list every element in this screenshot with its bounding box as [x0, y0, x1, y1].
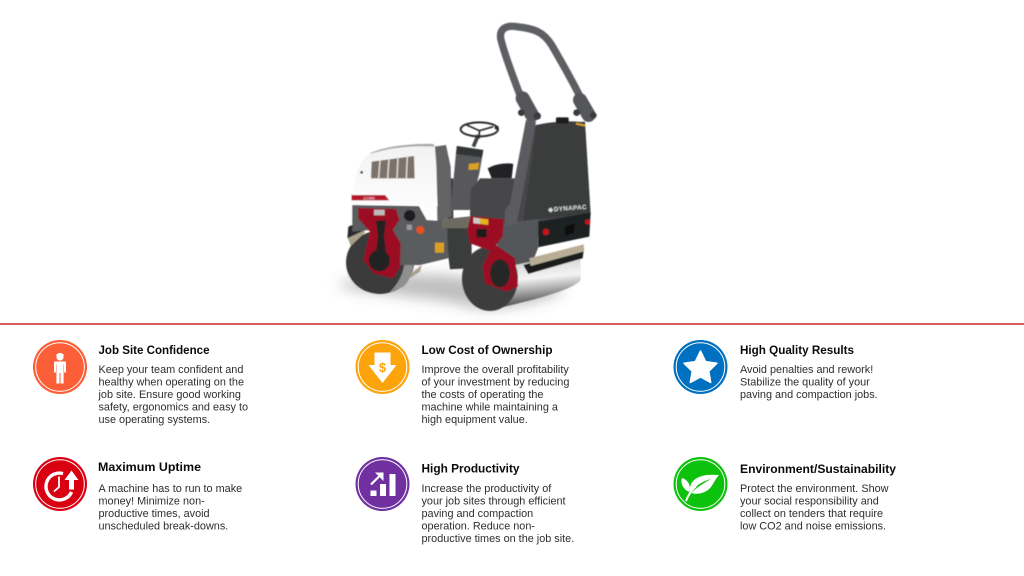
ground shadow: [337, 274, 567, 309]
text block: use operating systems.: [98, 414, 210, 426]
text block: healthy when operating on the: [98, 376, 244, 388]
seat: [488, 163, 513, 178]
text block: [740, 483, 889, 532]
front drum red bracket: [467, 216, 518, 292]
text block: Stabilize the quality of your: [740, 376, 870, 388]
heading: Job Site Confidence: [98, 343, 210, 357]
heading: Maximum Uptime: [98, 460, 201, 474]
rear body and seat back: [470, 122, 591, 237]
panel: maximum uptime: [33, 457, 242, 532]
steering wheel: [461, 122, 498, 136]
text block: paving and compaction jobs.: [740, 389, 878, 401]
rear control panel: [538, 213, 591, 247]
panel: job site confidence: [33, 340, 248, 426]
text block: safety, ergonomics and easy to: [98, 402, 248, 414]
text block: Avoid penalties and rework!: [740, 364, 873, 376]
icon: worker: [33, 340, 87, 394]
icon: rising bars: [356, 457, 410, 511]
panel: environment and sustainability: [674, 457, 896, 532]
text block: [740, 364, 878, 401]
machine: roller compactor: [337, 26, 597, 311]
text block: the costs of operating the: [422, 389, 543, 401]
text block: productive times, avoid: [98, 508, 210, 520]
heading: Low Cost of Ownership: [422, 343, 552, 357]
text block: your job sites through efficient: [422, 496, 566, 508]
text block: of your investment by reducing: [422, 376, 569, 388]
hood red stripe: [352, 195, 389, 200]
panel: high productivity: [356, 457, 574, 545]
hood vent: [371, 156, 415, 178]
text block: [98, 483, 242, 532]
seat frame strut: [505, 120, 536, 227]
heading: Environment/Sustainability: [740, 462, 896, 476]
text block: [422, 364, 569, 426]
panel: low cost of ownership: [356, 340, 569, 426]
icon: dollar down arrow: $: [379, 360, 387, 375]
divider line: [0, 323, 1024, 325]
brand text on body: DYNAPAC: [554, 204, 587, 213]
icon: clock with up arrow: [33, 457, 87, 511]
text block: collect on tenders that require: [740, 508, 883, 520]
icon: dollar down arrow: [356, 340, 410, 394]
frame body: [352, 205, 448, 265]
heading: High Productivity: [422, 462, 520, 476]
platform: [442, 216, 473, 228]
text block: Keep your team confident and: [98, 364, 243, 376]
white hood: [352, 144, 437, 221]
text block: machine while maintaining a: [422, 402, 559, 414]
machine: roller compactor: CC950: [363, 196, 375, 200]
rear drum red bracket: [358, 208, 401, 278]
text block: Improve the overall profitability: [422, 364, 569, 376]
front drum: [493, 252, 581, 309]
rear drum: [346, 231, 414, 294]
heading: High Quality Results: [740, 343, 854, 357]
text block: high equipment value.: [422, 414, 528, 426]
icon: leaf: [674, 457, 728, 511]
text block: your social responsibility and: [740, 496, 879, 508]
text block: unscheduled break-downs.: [98, 520, 228, 532]
text block: Increase the productivity of: [422, 483, 552, 495]
icon: star: [674, 340, 728, 394]
text block: operation. Reduce non-: [422, 520, 535, 532]
lower side panel: [497, 219, 538, 273]
text block: [98, 364, 248, 426]
text block: [422, 483, 574, 545]
text block: low CO2 and noise emissions.: [740, 520, 886, 532]
hood controls: [404, 210, 415, 221]
text block: money! Minimize non-: [98, 496, 205, 508]
rear handle bar: [500, 26, 597, 120]
panel: high quality results: [674, 340, 878, 401]
steering column: [451, 146, 483, 210]
text block: Protect the environment. Show: [740, 483, 889, 495]
text block: job site. Ensure good working: [98, 389, 241, 401]
text block: paving and compaction: [422, 508, 533, 520]
text block: A machine has to run to make: [98, 483, 242, 495]
centre chassis backing: [445, 178, 472, 269]
text block: productive times on the job site.: [422, 533, 574, 545]
